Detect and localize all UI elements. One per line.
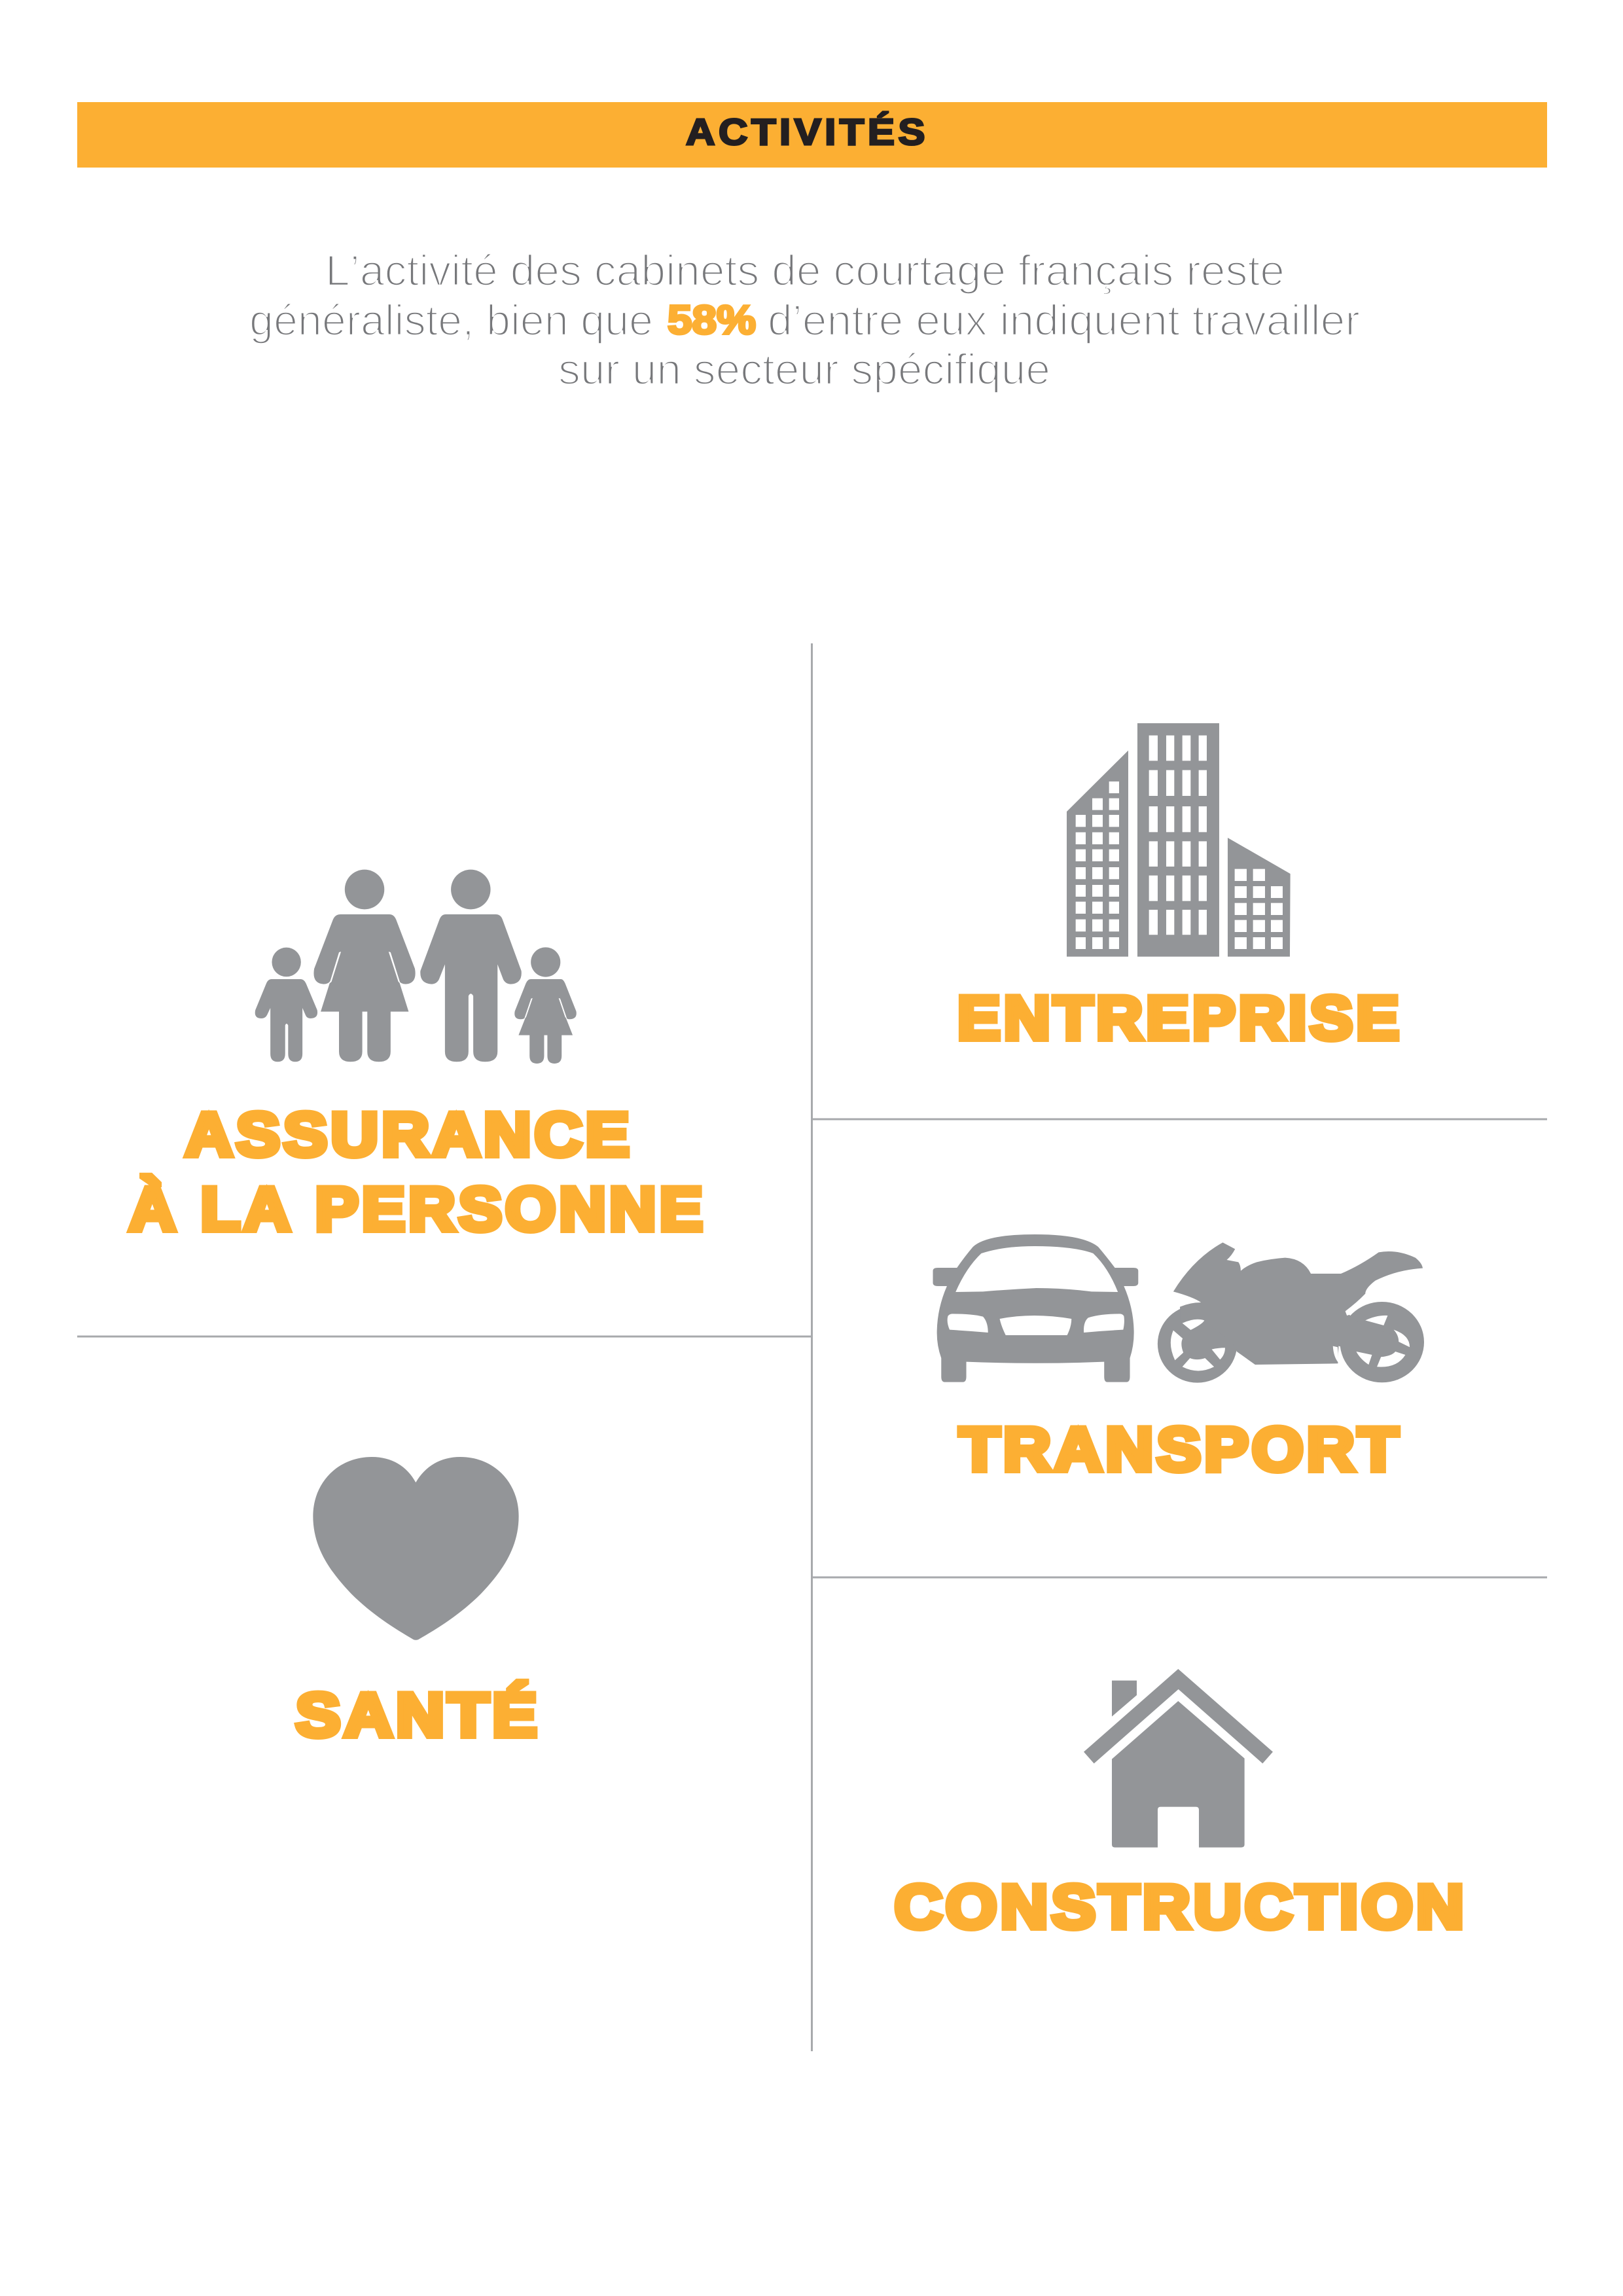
icon: heart — [313, 1457, 519, 1640]
intro text block: L’activité des cabinets de courtage français reste — [325, 246, 1285, 295]
icon: buildings — [1067, 723, 1291, 957]
icon: family — [255, 870, 577, 1064]
intro text block: sur un secteur spécifique — [558, 345, 1050, 393]
panel: santé — [296, 1457, 541, 1749]
panel: transport — [933, 1234, 1424, 1483]
banner title: ACTIVITÉS — [686, 111, 929, 153]
icon: house — [1084, 1669, 1273, 1848]
panel: construction — [895, 1669, 1467, 1941]
label: construction: CONSTRUCTION — [895, 1872, 1467, 1941]
intro text block: 58% — [668, 298, 756, 343]
label: assurance à la personne — [129, 1100, 706, 1244]
intro text block — [249, 246, 1360, 393]
label: transport: TRANSPORT — [959, 1415, 1402, 1483]
label: entreprise: ENTREPRISE — [957, 983, 1402, 1052]
intro text block: généraliste, bien que — [249, 296, 653, 344]
header banner — [77, 102, 1547, 168]
intro text block: d’entre eux indiquent travailler — [768, 296, 1360, 344]
label: assurance à la personne: ASSURANCE — [185, 1100, 633, 1169]
icon: car — [933, 1234, 1138, 1382]
label: santé: SANTÉ — [296, 1681, 541, 1749]
label: assurance à la personne: À LA PERSONNE — [129, 1174, 706, 1244]
panel: assurance à la personne — [129, 870, 706, 1244]
icon: motorcycle — [1158, 1242, 1424, 1383]
panel: entreprise — [957, 723, 1402, 1052]
